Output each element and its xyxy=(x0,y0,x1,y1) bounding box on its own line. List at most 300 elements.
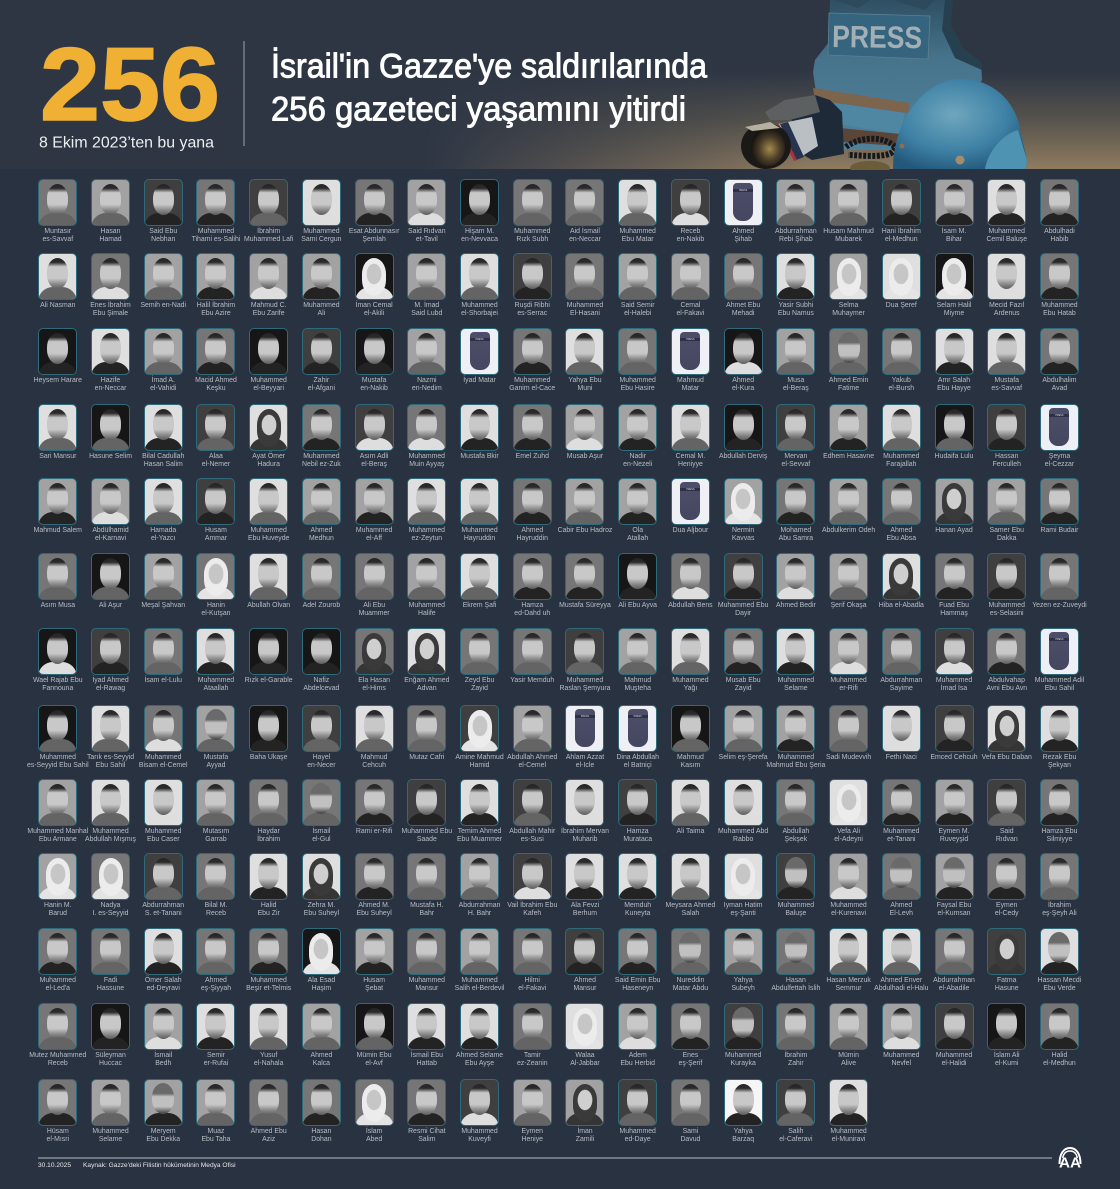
portrait: Muhammed ez-Zeytun: ez-Zeytun xyxy=(412,535,442,542)
portrait: Mustafa es-Savvaf: Mustafa xyxy=(994,377,1019,384)
portrait: Muhammed Muin Ayyaş: Muhammed xyxy=(409,453,445,460)
portrait: Hasan Hamad xyxy=(91,179,130,243)
portrait: Ahmed Ebu Aziz: Ahmed Ebu xyxy=(251,1128,287,1135)
portrait: Nureddin Matar Abdu xyxy=(671,928,710,994)
portrait: Muhammed es-Selasini xyxy=(987,553,1026,619)
portrait: Enğam Ahmed Advan xyxy=(407,628,446,694)
portrait: Muhammed Adil Ebu Sahil: Muhammed Adil xyxy=(1035,677,1084,684)
portrait: Ahmet Ebu Mehadi: Mehadi xyxy=(732,310,754,317)
portrait: Dua Aljbour: PRESS xyxy=(686,488,694,490)
portrait: Muhammed Salih el-Berdevil: Muhammed xyxy=(461,977,498,984)
portrait: Muhammed Yağı: Muhammed xyxy=(672,677,709,684)
portrait: Mustafa es-Savvaf xyxy=(987,328,1026,394)
row 13 of portraits xyxy=(38,1079,1113,1147)
portrait: Abdurrahman S. et-Tanani xyxy=(144,853,183,919)
portrait: Muhammed ed-Daye: Muhammed xyxy=(620,1128,656,1135)
portrait: İslam Ali el-Kumi: İslam Ali xyxy=(994,1052,1020,1059)
portrait: İyad Matar xyxy=(460,328,499,394)
portrait: Hüsam el-Mısri: el-Mısri xyxy=(46,1136,69,1143)
portrait: Mahmud Matar: PRESS xyxy=(686,338,694,341)
portrait: Selma Muhaymer xyxy=(829,253,868,317)
portrait: Hiba el-Abadla xyxy=(882,553,921,619)
portrait: Mahmud Salem xyxy=(38,478,77,544)
portrait: Muhammed el-Kurenavi: el-Kurenavi xyxy=(831,910,866,917)
portrait: Abdurrahman el-Abadile: el-Abadile xyxy=(939,985,969,992)
portrait: İman Cemal el-Akili: el-Akili xyxy=(364,310,384,317)
portrait: Ahmed el-Kura xyxy=(724,328,763,394)
portrait: Muhammed Adil Ebu Sahil: Ebu Sahil xyxy=(1045,685,1074,692)
portrait: Vail İbrahim Ebu Kafeh: Vail İbrahim Ebu xyxy=(507,902,557,909)
portrait: İsmail el-Gul: el-Gul xyxy=(312,836,331,843)
portrait: Yahya Subeyh: Subeyh xyxy=(731,985,755,992)
portrait: Muhammed Nebil ez-Zuk: Muhammed xyxy=(303,453,340,460)
portrait: Mahmud Muşteha: Mahmud xyxy=(624,677,651,684)
portrait: Hasan Abdulfettah İslih: Hasan xyxy=(786,977,806,984)
portrait: Rezak Ebu Şekyan xyxy=(1040,705,1079,771)
portrait: Said Semir el-Halebi: el-Halebi xyxy=(624,310,651,317)
portrait: Walaa Al-Jabbar: Al-Jabbar xyxy=(570,1060,600,1067)
portrait: Fatma Hasune xyxy=(987,928,1026,994)
portrait: Husam Şebat: Şebat xyxy=(365,985,383,992)
portrait: Nadir en-Nezeli: Nadir xyxy=(629,453,646,460)
portrait: Muhammed Ebu Hatab: Muhammed xyxy=(1041,302,1078,308)
portrait: Yezen ez-Zuveydi xyxy=(1040,553,1079,619)
portrait: İbrahim eş-Şeyh Ali: eş-Şeyh Ali xyxy=(1042,910,1077,917)
portrait: Muhammed Hayruddin xyxy=(460,478,499,544)
portrait: Wael Rajab Ebu Fannouna: Wael Rajab Ebu xyxy=(33,677,83,684)
portrait: Enes İbrahim Ebu Şimale: Enes İbrahim xyxy=(90,302,131,308)
portrait: Fuad Ebu Hammaş: Fuad Ebu xyxy=(939,602,969,609)
portrait: Ahlam Azzat el-Icle: Ahlam Azzat xyxy=(566,754,604,761)
portrait: Muhammed Abd Rabbo: Muhammed Abd xyxy=(718,828,768,835)
portrait: İbrahim eş-Şeyh Ali: İbrahim xyxy=(1048,902,1071,909)
portrait: Muhammed el-Muniravi xyxy=(829,1079,868,1145)
portrait: Dina Abdullah el Batniçi xyxy=(618,705,657,771)
illustration: coiled cable xyxy=(846,139,895,156)
portrait: Tamir ez-Zeanin xyxy=(513,1003,552,1069)
portrait: Yakub el-Bursh: el-Bursh xyxy=(888,385,914,392)
portrait: Muhammed Abdullah Mışmış xyxy=(91,779,130,845)
portrait: Hayel en-Necer xyxy=(302,705,341,771)
portrait: Ahmed Şihab: Ahmed xyxy=(732,228,754,234)
portrait: Fuad Ebu Hammaş xyxy=(935,553,974,619)
portrait: Said Ebu Nebhan: Said Ebu xyxy=(149,228,177,234)
portrait: Mahmud Matar: Matar xyxy=(682,385,699,392)
portrait: Mahmud Matar: Mahmud xyxy=(677,377,704,384)
portrait: Muhammed Nebil ez-Zuk xyxy=(302,404,341,470)
portrait: Tarık es-Seyyid Ebu Sahil: Ebu Sahil xyxy=(96,762,125,769)
portrait: Ali Ebu Muammer: Ali Ebu xyxy=(363,602,385,609)
portrait: Muhammed İmad İsa: İmad İsa xyxy=(941,685,967,692)
portrait: Muhammed el-Aff xyxy=(355,478,394,544)
portrait: Muhammed Ebu Caser: Ebu Caser xyxy=(147,836,180,843)
portrait: Said Emin Ebu Haseneyn xyxy=(618,928,657,994)
portrait: Hudaifa Lulu xyxy=(935,404,974,470)
portrait: Heysem Harare xyxy=(38,328,77,394)
portrait: Mümin Alive: Mümin xyxy=(838,1052,859,1059)
portrait: Muhammed Baluşe: Muhammed xyxy=(778,902,814,909)
portrait: Ahmed Ebu Aziz xyxy=(249,1079,288,1145)
portrait: Muhammed ez-Zeytun: Muhammed xyxy=(409,526,445,534)
portrait: Muhammed ed-Daye xyxy=(618,1079,657,1145)
portrait: Ela Hasan el-Hims: el-Hims xyxy=(362,685,386,692)
portrait: Muhammed el-Halidi xyxy=(935,1003,974,1069)
portrait: Şeyma el-Cezzar xyxy=(1040,404,1079,470)
portrait: Ali Taima xyxy=(671,779,710,845)
portrait: Yahya Subeyh xyxy=(724,928,763,994)
portrait: Selim eş-Şerefa: Selim eş-Şerefa xyxy=(719,754,768,761)
portrait: Muhammed Ebu Caser xyxy=(144,779,183,845)
portrait: Asım Adli el-Beraş: Asım Adli xyxy=(360,453,388,460)
portrait: Ahmed eş-Şiyyah xyxy=(196,928,235,994)
portrait: Muhammed er-Rifi xyxy=(829,628,868,694)
portrait: Hanin M. Barud: Hanin M. xyxy=(44,902,72,909)
portrait: İbrahim Zahir: İbrahim xyxy=(784,1052,807,1059)
portrait: Said Semir el-Halebi: Said Semir xyxy=(621,302,655,308)
portrait: Muaz Ebu Taha: Ebu Taha xyxy=(201,1136,230,1143)
portrait: Ela Hasan el-Hims xyxy=(355,628,394,694)
portrait: Ahmed M. Ebu Suheyl: Ahmed M. xyxy=(358,902,390,909)
portrait: Amr Salah Ebu Hayye: Amr Salah xyxy=(938,377,970,384)
portrait: Muhammed El-Hasani: Muhammed xyxy=(567,302,603,308)
portrait: Muhammed Halife: Halife xyxy=(418,610,436,617)
portrait: Husam Mahmud Mubarek xyxy=(823,179,874,243)
portrait: Tamir ez-Zeanin: Tamir xyxy=(524,1052,541,1059)
portrait: Muhammed Ganim el-Cace xyxy=(513,328,552,394)
portrait: Muhammed Manhal Ebu Armane: Ebu Armane xyxy=(39,836,77,843)
portrait: Hani İbrahim el-Medhun: el-Medhun xyxy=(885,236,918,243)
portrait: Halid Ebu Zir: Ebu Zir xyxy=(258,910,280,917)
portrait: Mustafa H. Bahr xyxy=(407,853,446,919)
portrait: Hazife en-Neccar xyxy=(91,328,130,394)
portrait: Muhammed Ataallah: Muhammed xyxy=(198,677,234,684)
portrait: Hamza Ebu Silmiyye xyxy=(1040,779,1079,845)
portrait: Esat Abdunnasır Şemlah xyxy=(349,179,400,243)
portrait: Muhammed es-Selasini: Muhammed xyxy=(989,602,1025,609)
portrait: Abdurrahman H. Bahr xyxy=(460,853,499,919)
portrait: Muhammed Tihami es-Salihi xyxy=(192,179,240,243)
portrait: Ahmed Enver Abdulhadi el-Halu xyxy=(882,928,921,994)
portrait: İsmail Ebu Hattab: Hattab xyxy=(417,1060,437,1067)
portrait: Abdullah Ahmed el-Cemel: el-Cemel xyxy=(518,762,546,769)
portrait: Meysara Ahmed Salah: Salah xyxy=(682,910,699,917)
portrait: Muhammed Selame xyxy=(776,628,815,694)
portrait: Vail İbrahim Ebu Kafeh xyxy=(513,853,552,919)
portrait: Hamada el-Yazcı: el-Yazcı xyxy=(151,535,175,542)
portrait: Walaa Al-Jabbar: Walaa xyxy=(575,1052,595,1059)
portrait: Ahmed Mansur: Mansur xyxy=(573,985,596,992)
row 3 of portraits xyxy=(38,328,1113,396)
portrait: Hişam M. en-Nevvaca: en-Nevvaca xyxy=(461,236,498,243)
portrait: Musab Ebu Zayid: Zayid xyxy=(735,685,752,692)
portrait: Hassan Ferculleh: Ferculleh xyxy=(993,461,1021,468)
portrait: Yahya Ebu Muni xyxy=(565,328,604,394)
portrait: Muhammed Sami Cergun: Sami Cergun xyxy=(301,236,342,243)
portrait: Abdulkerim Odeh xyxy=(829,478,868,544)
portrait: Musab Ebu Zayid: Musab Ebu xyxy=(726,677,761,684)
portrait: Mutaz Cafri: Mutaz Cafri xyxy=(409,754,444,761)
portrait: Dua Aljbour: Dua Aljbour xyxy=(673,526,708,534)
portrait: Hamza ed-Dahd uh: ed-Dahd uh xyxy=(514,610,550,617)
portrait: Ahmed Mansur: Ahmed xyxy=(574,977,596,984)
portrait: Resmi Cihat Salim: Resmi Cihat xyxy=(408,1128,446,1135)
portrait: Husam Ammar: Ammar xyxy=(205,535,227,542)
portrait: Mutasım Garrab xyxy=(196,779,235,845)
portrait: Enes eş-Şerif xyxy=(671,1003,710,1069)
portrait: Ahmed El-Levh xyxy=(882,853,921,919)
portrait: Adem Ebu Herbid: Adem xyxy=(629,1052,647,1059)
portrait: Ahmed Ebu Aziz: Aziz xyxy=(262,1136,275,1143)
portrait: Hişam M. en-Nevvaca: Hişam M. xyxy=(465,228,494,234)
portrait: Muhammed Beşir et-Telmis: Beşir et-Telmis xyxy=(246,985,291,992)
portrait: Ahmed Hayruddin: Hayruddin xyxy=(517,535,548,542)
portrait: Mustafa Bkir: Mustafa Bkir xyxy=(460,453,499,460)
portrait: Muhammed Ali xyxy=(302,253,341,317)
portrait: Mohamed Abu Samra: Mohamed xyxy=(781,526,811,534)
portrait: Nadir en-Nezeli xyxy=(618,404,657,470)
portrait: Nermin Kavvas: Nermin xyxy=(732,526,754,534)
portrait: Abdullah Şekşek: Şekşek xyxy=(785,836,807,843)
portrait: Yakub el-Bursh: Yakub xyxy=(892,377,911,384)
portrait: Aid İsmail en-Neccar xyxy=(565,179,604,243)
portrait: Hassan Mecdi Ebu Verde: Hassan Mecdi xyxy=(1038,977,1081,984)
portrait: Hudaifa Lulu: Hudaifa Lulu xyxy=(935,453,973,460)
portrait: Muhammed Rızk Subh: Muhammed xyxy=(514,228,550,234)
portrait: Walaa Al-Jabbar xyxy=(565,1003,604,1069)
portrait: Muhammed Raslan Şemyura: Muhammed xyxy=(567,677,603,684)
portrait: Meşal Şahvan xyxy=(144,553,183,619)
portrait: Eymen Heniye: Heniye xyxy=(522,1136,543,1143)
portrait: Fethi Naci: Fethi Naci xyxy=(886,754,917,761)
portrait: Ala Fevzi Berhum: Berhum xyxy=(573,910,597,917)
portrait: Abdulhadi Habib: Habib xyxy=(1050,236,1068,243)
portrait: Ahmed Medhun xyxy=(302,478,341,544)
portrait: Hanan Ayad xyxy=(935,478,974,544)
portrait: Mahmud Cehcuh: Cehcuh xyxy=(362,762,386,769)
portrait: Abdulhalim Avad xyxy=(1040,328,1079,394)
portrait: Muhammed Beşir et-Telmis xyxy=(249,928,288,994)
portrait: Muhammed Hayruddin: Hayruddin xyxy=(464,535,495,542)
portrait: Said Ebu Nebhan xyxy=(144,179,183,243)
portrait: Mümin Alive: Alive xyxy=(841,1060,856,1067)
portrait: Macid Ahmed Keşku: Macid Ahmed xyxy=(195,377,237,384)
portrait: Bilal Cadullah Hasan Salim: Hasan Salim xyxy=(144,461,183,468)
portrait: Hanin el-Kutşan xyxy=(196,553,235,619)
portrait: Hanan Ayad: Hanan Ayad xyxy=(935,526,973,534)
portrait: Hasan Dohan: Dohan xyxy=(311,1136,332,1143)
portrait: Tarık es-Seyyid Ebu Sahil xyxy=(91,705,130,771)
portrait: Hasan Merzuk Semmur xyxy=(829,928,868,994)
portrait: Ahlam Azzat el-Icle: el-Icle xyxy=(576,762,594,769)
portrait: Muhammed el-Beyyari: el-Beyyari xyxy=(253,385,284,392)
portrait: Muhammed Ebu Caser: Muhammed xyxy=(145,828,181,835)
portrait: Hasan Abdulfettah İslih: Abdulfettah İslih xyxy=(771,985,820,992)
portrait: Said Rıdvan: Said xyxy=(1000,828,1014,835)
portrait: Macid Ahmed Keşku: Keşku xyxy=(206,385,226,392)
portrait: Muhammed Selame: Muhammed xyxy=(92,1128,129,1135)
portrait: Ala Esad Haşim: Haşim xyxy=(312,985,331,992)
portrait: Muhammed Ebu Dayir: Muhammed Ebu xyxy=(718,602,768,609)
portrait: Ahmed Emin Fatime: Ahmed Emin xyxy=(829,377,868,384)
portrait: Hiba el-Abadla: Hiba el-Abadla xyxy=(879,602,924,609)
portrait: Meşal Şahvan: Meşal Şahvan xyxy=(141,602,185,609)
title: İsrail'in Gazze'ye saldırılarında xyxy=(271,47,707,85)
portrait: Musab Aşur: Musab Aşur xyxy=(567,453,603,460)
portrait: Faysal Ebu el-Kumsan: Faysal Ebu xyxy=(937,902,971,909)
portrait: Muhammed Bisam el-Cemel: Muhammed xyxy=(145,754,181,761)
portrait: Muhammed Ebu Dayir: Dayir xyxy=(735,610,751,617)
portrait: Mutez Muhammed Receb xyxy=(38,1003,77,1069)
header banner xyxy=(39,0,1120,170)
portrait: Muhammed Tihami es-Salihi: Tihami es-Salihi xyxy=(192,236,240,243)
portrait: İsmail Ebu Hattab: İsmail Ebu xyxy=(411,1052,443,1059)
portrait: Ahmed Hayruddin xyxy=(513,478,552,544)
portrait: Enes İbrahim Ebu Şimale: Ebu Şimale xyxy=(93,310,128,317)
portrait: Ayat Ömer Hadura: Hadura xyxy=(257,461,280,468)
portrait: Muhammed el-Aff: Muhammed xyxy=(356,526,392,534)
portrait: Muhammed İmad İsa xyxy=(935,628,974,694)
portrait: Ali Ebu Ayva xyxy=(618,553,657,619)
portrait: Bilal M. Receb: Bilal M. xyxy=(205,902,227,909)
portrait: İbrahim Zahir xyxy=(776,1003,815,1069)
portrait: Ahmed Medhun: Medhun xyxy=(309,535,334,542)
portrait: Asım Adli el-Beraş: el-Beraş xyxy=(361,461,387,468)
portrait: Eymen Heniye xyxy=(513,1079,552,1145)
portrait: İsam M. Bihar: İsam M. xyxy=(942,228,966,234)
portrait: Zehra M. Ebu Suheyl: Ebu Suheyl xyxy=(304,910,339,917)
portrait: Hazife en-Neccar: Hazife xyxy=(101,377,120,384)
portrait: Mustafa Bkir xyxy=(460,404,499,470)
portrait: Salih el-Caferavi: Salih xyxy=(788,1128,804,1135)
portrait: Ahmed Şihab xyxy=(724,179,763,243)
portrait: Ola Atallah: Ola xyxy=(632,526,643,534)
portrait: Hassan Ferculleh: Hassan xyxy=(995,453,1018,460)
portrait: Memduh Kuneyta: Kuneyta xyxy=(625,910,650,917)
portrait: Mahmud Kasım: Mahmud xyxy=(677,754,704,761)
portrait: Şerif Okaşa xyxy=(829,553,868,619)
portrait: Mustafa Ayyad: Ayyad xyxy=(206,762,225,769)
portrait: Muhammed Salih el-Berdevil: Salih el-Berdevil xyxy=(455,985,504,992)
portrait: Ali Nasman: Ali Nasman xyxy=(40,302,75,308)
portrait: Muhammed Ebu Hatab: Ebu Hatab xyxy=(1043,310,1076,317)
portrait: Selim eş-Şerefa xyxy=(724,705,763,771)
portrait: Amr Salah Ebu Hayye xyxy=(935,328,974,394)
portrait: Ruşdi Ribhi es-Serrac xyxy=(513,253,552,317)
portrait: Muhammed Ebu Hatab xyxy=(1040,252,1079,318)
portrait: Said Ebu Nebhan: Nebhan xyxy=(151,236,175,243)
portrait: Mümin Ebu el-Avf: Mümin Ebu xyxy=(357,1052,392,1059)
portrait: Mutez Muhammed Receb: Receb xyxy=(48,1060,68,1067)
portrait: Ömer Salah ed-Deyravi: ed-Deyravi xyxy=(147,985,180,992)
portrait: M. İmad Said Lubd: M. İmad xyxy=(414,302,439,308)
portrait: Muhammed Sami Cergun: Muhammed xyxy=(303,228,340,234)
portrait: Muhammed Baluşe xyxy=(776,853,815,919)
portrait: Muhammed Selame: Selame xyxy=(784,685,808,692)
portrait: Hüsam el-Mısri xyxy=(38,1079,77,1145)
portrait: İsam el-Lulu xyxy=(144,628,183,694)
row 9 of portraits xyxy=(38,779,1113,847)
portrait: Amr Salah Ebu Hayye: Ebu Hayye xyxy=(937,385,971,392)
portrait: Muhammed Baluşe: Baluşe xyxy=(785,910,806,917)
portrait: Adel Zourob: Adel Zourob xyxy=(303,602,340,609)
portrait: Hazife en-Neccar: en-Neccar xyxy=(95,385,126,392)
portrait: Abdurrahman Sayime: Abdurrahman xyxy=(880,677,922,684)
row 4 of portraits xyxy=(38,404,1113,472)
portrait: Selam Halil Miyme: Selam Halil xyxy=(937,302,971,308)
portrait: Abdullah Derviş xyxy=(724,404,763,470)
portrait: Selma Muhaymer: Selma xyxy=(839,302,858,308)
portrait: Mecid Fazıl Ardenus xyxy=(987,252,1026,318)
portrait: Esat Abdunnasır Şemlah: Esat Abdunnasır xyxy=(349,228,399,234)
portrait: Muaz Ebu Taha: Muaz xyxy=(208,1128,224,1135)
portrait: Amine Mahmud Hamid xyxy=(460,705,499,771)
portrait: Muhammed el-Shorbajei: el-Shorbajei xyxy=(461,310,498,317)
portrait: Semir er-Rufai: Semir xyxy=(207,1052,225,1059)
portrait: İman Zamili: Zamili xyxy=(576,1136,594,1143)
portrait: Ahmed Ebu Absa xyxy=(882,478,921,544)
portrait: Muhammed el-Muniravi: Muhammed xyxy=(830,1128,867,1135)
portrait: Aid İsmail en-Neccar: Aid İsmail xyxy=(570,228,600,234)
portrait: Musa el-Beraş: el-Beraş xyxy=(783,385,809,392)
portrait: Muhammed Ali: Muhammed xyxy=(303,302,340,308)
portrait: Muhammed Ebu Saade: Saade xyxy=(417,836,437,843)
portrait: Vefa Ebu Daban xyxy=(987,705,1026,771)
portrait: Mervan el-Sevvaf xyxy=(776,404,815,470)
portrait: Hanin el-Kutşan: Hanin xyxy=(207,602,225,609)
portrait: Muhammed ed-Daye: ed-Daye xyxy=(625,1136,651,1143)
portrait: Meryem Ebu Dekka: Meryem xyxy=(151,1128,176,1135)
portrait: Hilmi el-Fakavi xyxy=(513,928,552,994)
portrait: İsmail Bedh xyxy=(144,1003,183,1069)
portrait: Abdullah Mahir es-Susi xyxy=(513,779,552,845)
portrait: Selam Halil Miyme: Miyme xyxy=(944,310,964,317)
portrait: İbrahim Mervan Muharib: Muharib xyxy=(573,836,597,843)
portrait: Alaa el-Nemer xyxy=(196,404,235,470)
portrait: Mahmud Cehcuh xyxy=(355,705,394,771)
portrait: Hanin el-Kutşan: el-Kutşan xyxy=(201,610,231,617)
portrait: İyad Ahmed el-Rawag: İyad Ahmed xyxy=(92,677,129,684)
portrait: Halil İbrahim Ebu Azire: Halil İbrahim xyxy=(197,302,235,308)
portrait: Tarık es-Seyyid Ebu Sahil: Tarık es-Seyyid xyxy=(87,754,134,761)
portrait: Ahlam Azzat el-Icle xyxy=(565,705,604,771)
portrait: Hassan Ferculleh xyxy=(987,404,1026,470)
portrait: Hamada el-Yazcı: Hamada xyxy=(150,526,176,534)
portrait: Mecid Fazıl Ardenus: Ardenus xyxy=(994,310,1020,317)
portrait: Muhammed el-Muniravi: el-Muniravi xyxy=(832,1136,865,1143)
portrait: Muhammed Halife: Muhammed xyxy=(409,602,445,609)
portrait: Mustafa en-Nakib: en-Nakib xyxy=(360,385,388,392)
portrait: Temim Ahmed Ebu Muammer: Temim Ahmed xyxy=(458,828,501,835)
portrait: Zahir el-Afgani: el-Afgani xyxy=(308,385,335,392)
portrait: Nadya I. es-Seyyid: I. es-Seyyid xyxy=(93,910,129,917)
portrait: Abullah Olvan: Abullah Olvan xyxy=(247,602,290,609)
portrait: İsam M. Bihar: Bihar xyxy=(946,236,962,243)
portrait: Dina Abdullah el Batniçi: Dina Abdullah xyxy=(616,754,659,761)
portrait: Mahmud Muşteha xyxy=(618,628,657,694)
portrait: Eymen M. Ruveyşid: Ruveyşid xyxy=(940,836,968,843)
portrait: Muhammed es-Selasini: es-Selasini xyxy=(990,610,1024,617)
portrait: Muhammed Ebu Huveyde: Ebu Huveyde xyxy=(248,535,289,542)
portrait: Muhammed Bisam el-Cemel xyxy=(144,705,183,771)
portrait: İman Zamili xyxy=(565,1079,604,1145)
portrait: Ahmed M. Ebu Suheyl xyxy=(355,853,394,919)
portrait: Muhammed El-Hasani xyxy=(565,253,604,317)
portrait: Musab Ebu Zayid xyxy=(724,628,763,694)
row 11 of portraits xyxy=(38,928,1113,996)
portrait: Iyman Hatim eş-Şanti: Iyman Hatim xyxy=(724,902,762,909)
portrait: Mohamed Abu Samra: Abu Samra xyxy=(779,535,813,542)
portrait: Husam Ammar: Husam xyxy=(205,526,227,534)
